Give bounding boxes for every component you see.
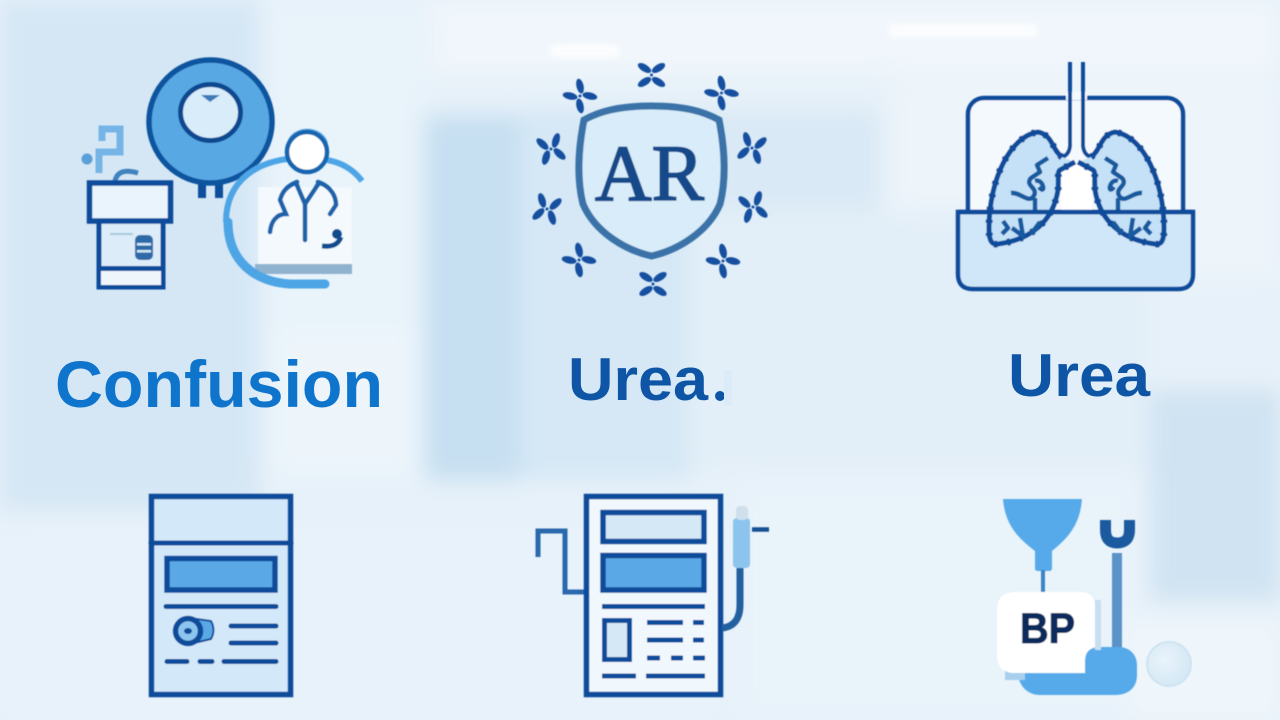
BP card [1005,668,1025,680]
lungs [958,62,1193,244]
icon: confusion scene [82,60,362,287]
shield label: AR [595,131,704,218]
icon: antibiotic resistance shield [529,61,771,298]
large circular device [149,60,272,198]
base [1018,647,1137,695]
doctor [226,129,362,284]
podium [90,171,170,287]
icon: lab report with tubing [538,496,769,694]
frame [968,98,1183,228]
gauge rod and U-tube [1106,520,1130,648]
probe [722,506,769,628]
heading: Confusion: Confusion [55,347,383,421]
icon: blood pressure device: BP [1020,605,1075,653]
basin [958,212,1193,289]
shield [579,106,724,256]
heading: Urea (right): Urea [1008,342,1151,409]
icon: blood pressure device [997,499,1191,695]
bacteria ring [529,61,771,298]
left tube [538,531,585,592]
ceiling lights [550,24,1038,58]
question mark [82,129,120,173]
heading: Urea (centre): Urea [568,346,709,413]
funnel [1003,499,1082,571]
icon: medical report with gauge [151,496,291,694]
bubble [1147,642,1191,686]
icon: lungs in basin [958,62,1193,289]
